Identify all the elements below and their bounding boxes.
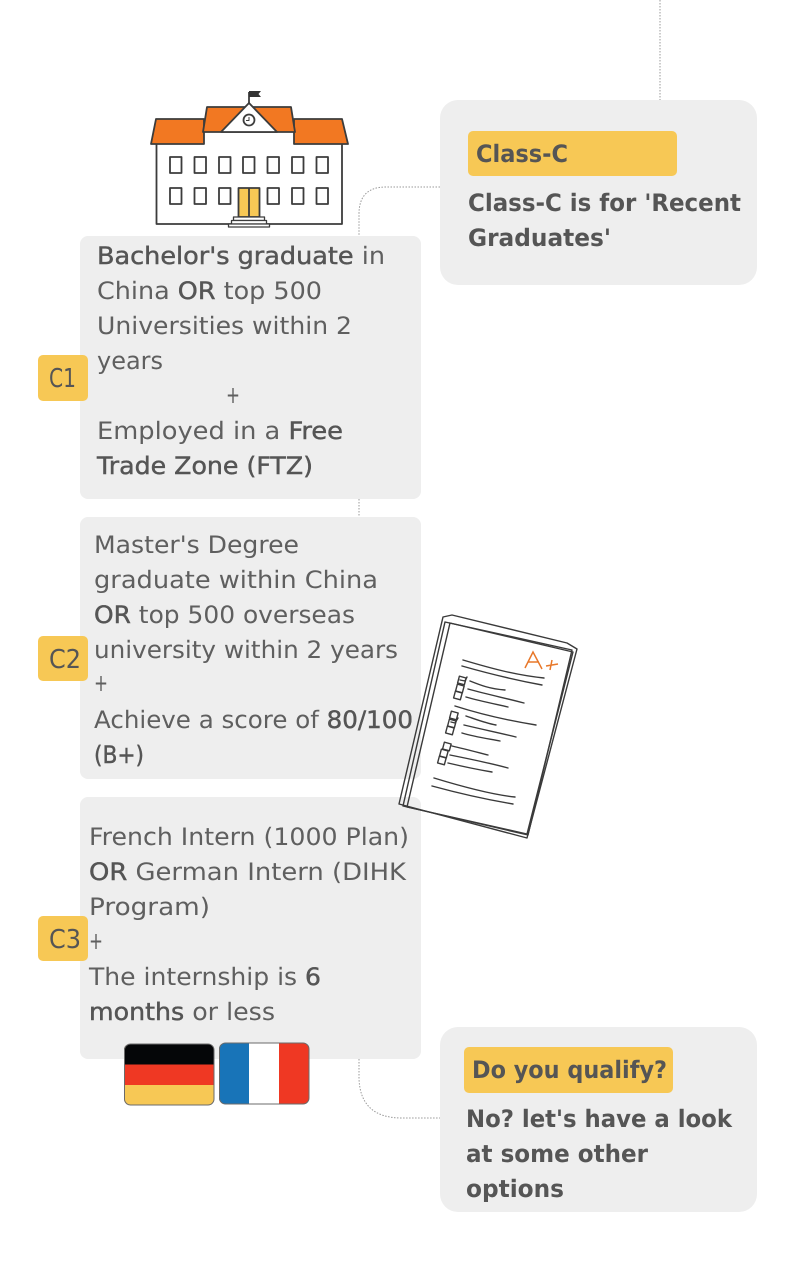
text: C3 requirements: months or less [89,998,275,1026]
text: C3 requirements: OR German Intern (DIHK [89,858,407,886]
text: C2 requirements [94,531,413,769]
text: qualify answer: at some other [466,1140,648,1168]
text: C2 requirements: (B+) [94,741,144,769]
text: class-C description: Class-C is for 'Recent [468,189,741,217]
connector: class card to C1 card [359,187,440,236]
text: C3 requirements [88,823,409,1026]
badge: C3 [38,916,88,961]
icon: school building [151,91,348,227]
connector: incoming line from above [659,0,661,100]
text: C1 requirements [96,242,385,480]
text: C1 requirements: China OR top 500 [97,277,322,305]
text: C2 requirements: university within 2 years [94,636,398,664]
label: Class-C [468,131,677,176]
text: C1 requirements: Trade Zone (FTZ) [96,452,313,480]
text: qualify answer: No? let's have a look [466,1105,733,1133]
text: C2 requirements: Achieve a score of 80/100 [94,706,413,734]
badge: C3: C3 [49,925,81,955]
badge: C1 [38,355,88,401]
text: C2 requirements: graduate within China [94,566,378,594]
connector: C3 card to qualify card [359,1059,440,1118]
text: C2 requirements: + [94,669,108,697]
text: C1 requirements: Employed in a Free [97,417,343,445]
badge: C2: C2 [49,645,81,675]
label: Do you qualify? [464,1047,673,1093]
text: class-C description: Graduates' [468,224,611,252]
panel: C3 requirements [80,797,421,1059]
text: C3 requirements: The internship is 6 [88,963,321,991]
icon: German flag [124,1044,214,1105]
panel: C1 requirements [80,236,421,499]
panel: class-C intro [440,100,757,285]
panel: C2 requirements [80,517,421,779]
text: C1 requirements: Universities within 2 [97,312,352,340]
icon: graded paper stack [399,615,577,838]
text: qualify answer [466,1105,733,1203]
text: C2 requirements: OR top 500 overseas [94,601,355,629]
text: C1 requirements: + [226,381,240,409]
icon: French flag [219,1043,309,1104]
text: C2 requirements: Master's Degree [94,531,299,559]
badge: C2 [38,636,88,681]
badge: C1: C1 [49,364,76,394]
text: class-C description [468,189,741,252]
text: C3 requirements: French Intern (1000 Plan) [89,823,409,851]
text: C3 requirements: Program) [89,893,210,921]
text: C3 requirements: + [89,927,103,955]
connector: C1 card to C2 card [358,499,360,517]
label: Do you qualify?: Do you qualify? [472,1056,667,1084]
text: C1 requirements: Bachelor's graduate in [97,242,385,270]
text: qualify answer: options [466,1175,564,1203]
text: C1 requirements: years [97,347,163,375]
panel: do you qualify [440,1027,757,1212]
label: Class-C: Class-C [476,140,568,168]
